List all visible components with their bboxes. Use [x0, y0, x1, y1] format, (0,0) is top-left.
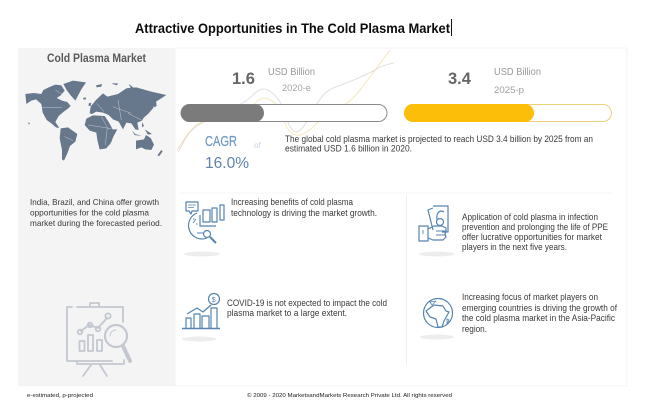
text: emerging countries: the cold plasma market in the Asia-Pacific [462, 313, 616, 323]
icon shadow 1 [184, 252, 220, 256]
text: emerging countries: emerging countries is driving the growth of [462, 303, 618, 313]
icon: globe [424, 298, 452, 328]
icon: rising bar chart with dollar [182, 294, 220, 328]
footnote: e-estimated, p-projected [27, 393, 93, 399]
text: emerging countries [462, 292, 618, 334]
text: market summary: The global cold plasma market is projected to reach USD 3.4 billion by 2025 from an [285, 134, 593, 144]
text: increasing benefits: technology is driving the market growth. [231, 208, 377, 218]
text: increasing benefits: Increasing benefits of cold plasma [231, 197, 353, 207]
text: covid-19 impact: COVID-19 is not expected to impact the cold [227, 298, 387, 308]
CAGR callout: CAGR [205, 133, 237, 150]
text: market summary: estimated USD 1.6 billion in 2020. [285, 144, 412, 154]
CAGR callout [205, 133, 261, 172]
text: growth opportunities: market during the forecasted period. [30, 218, 162, 228]
world map [25, 81, 166, 161]
value: 3.4 USD Billion 2025p: 2025-p [494, 85, 524, 96]
text: application of cold plasma [462, 212, 608, 252]
bar: 2020 value [181, 104, 387, 122]
decorative market trend curves [177, 50, 394, 152]
panel: left sidebar [18, 48, 175, 386]
icon shadow 2 [419, 252, 455, 256]
text: growth opportunities: India, Brazil, and China offer growth [30, 197, 159, 207]
text: application of cold plasma: prevention and prolonging the life of PPE [462, 222, 608, 232]
text: covid-19 impact [227, 298, 387, 318]
icon: hand holding banknotes [419, 206, 448, 241]
text: application of cold plasma: offer lucrative opportunities for market [462, 232, 603, 242]
text: market summary [285, 134, 593, 154]
icon shadow 4 [420, 334, 454, 340]
value: 3.4 USD Billion 2025p: 3.4 [448, 70, 472, 88]
text: increasing benefits [231, 197, 377, 218]
text: growth opportunities [30, 197, 162, 228]
value: 1.6 USD Billion 2020e: 1.6 [232, 70, 255, 88]
bar: 2025 value [404, 104, 612, 122]
CAGR callout: of [254, 141, 261, 150]
icon: pie chart with bars [186, 202, 224, 243]
copyright: © 2009 - 2020 MarketsandMarkets Research Private Ltd. All rights reserved [247, 392, 452, 399]
CAGR callout: 16.0% [205, 155, 249, 172]
heading: cold plasma market: Cold Plasma Market [47, 53, 146, 65]
text: emerging countries: Increasing focus of market players on [462, 292, 598, 302]
text: application of cold plasma: Application of cold plasma in infection [462, 212, 598, 222]
value: 1.6 USD Billion 2020e: 2020-e [282, 83, 311, 94]
icon: presentation board with magnifier [67, 303, 130, 376]
text: application of cold plasma: players in the next five years. [462, 242, 567, 252]
title: Attractive Opportunities in The Cold Plasma Market [135, 21, 450, 36]
value: 3.4 USD Billion 2025p: USD Billion [494, 67, 541, 78]
text: emerging countries: region. [462, 324, 487, 334]
value: 1.6 USD Billion 2020e: USD Billion [268, 67, 315, 78]
value: 1.6 USD Billion 2020e [232, 67, 315, 94]
icon shadow 3 [182, 336, 216, 342]
text: covid-19 impact: plasma market to a large extent. [227, 308, 347, 318]
value: 3.4 USD Billion 2025p [448, 67, 541, 96]
icon: rising bar chart with dollar: $ [212, 297, 216, 304]
text: growth opportunities: opportunities for the cold plasma [30, 208, 149, 218]
